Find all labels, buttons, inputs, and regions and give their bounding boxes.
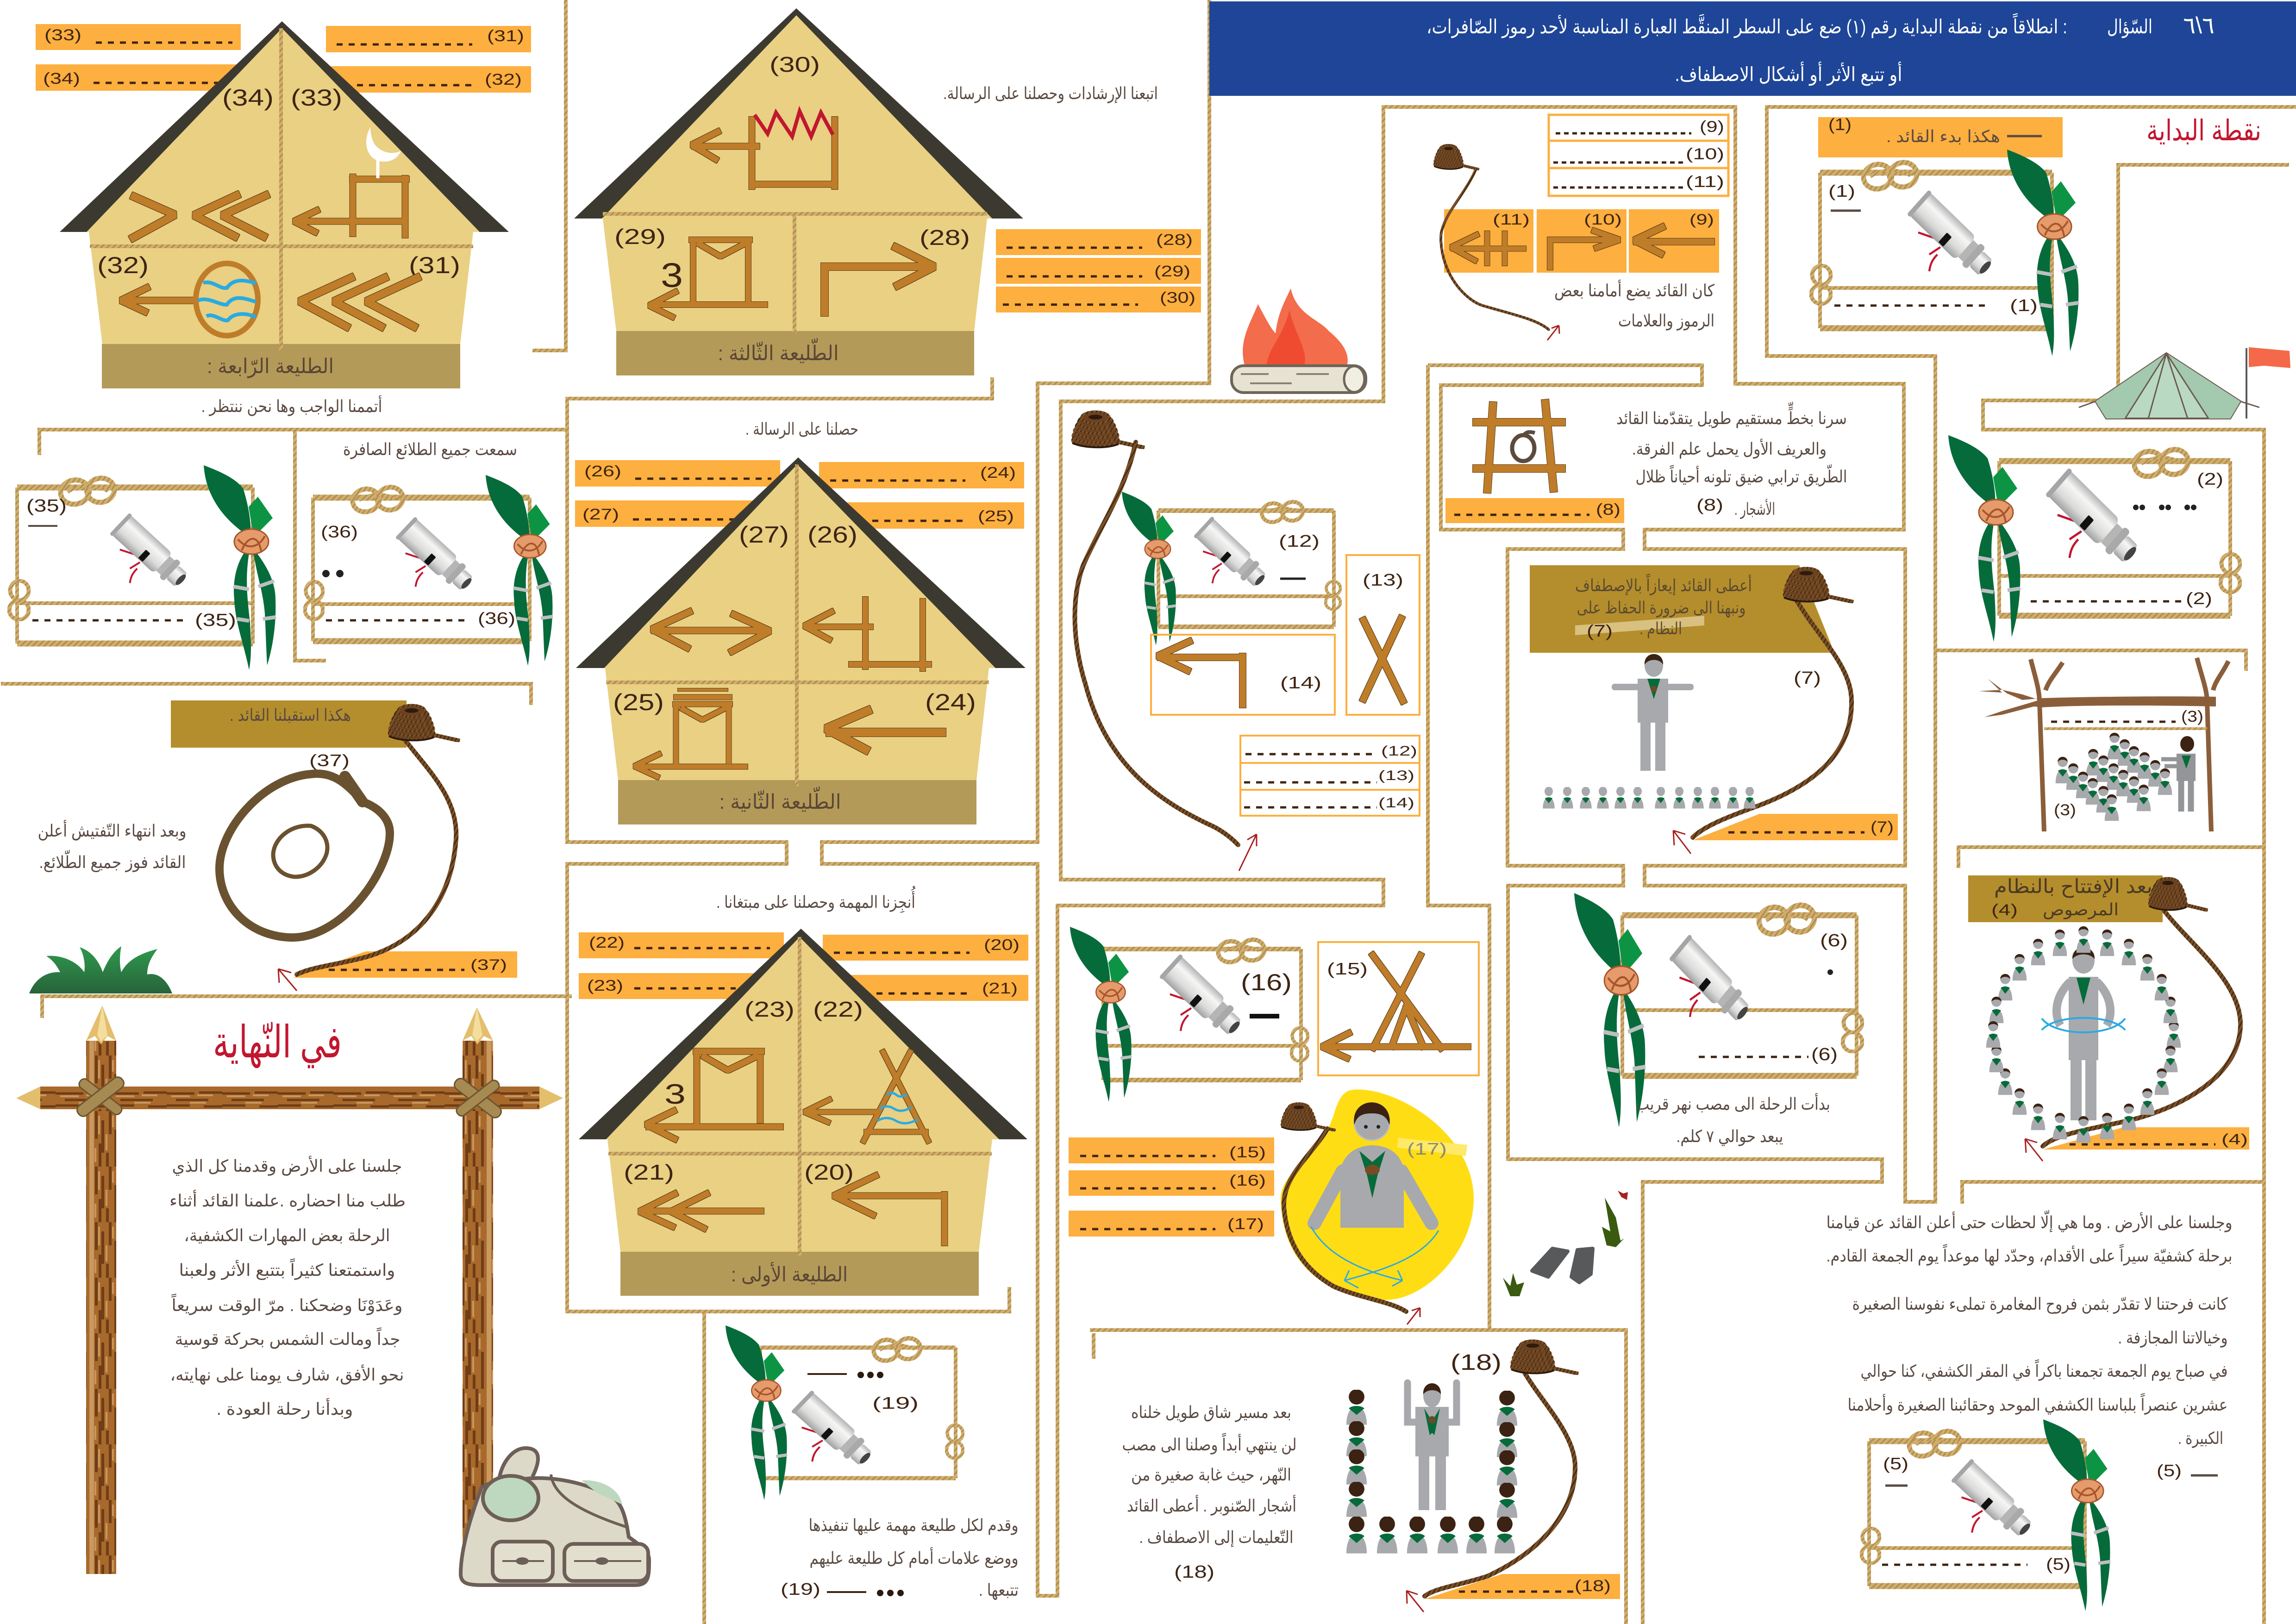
text: task given to each patrol: [781, 1516, 1019, 1600]
text: task given to each patrol: ووضع علامات أمام كل طليعة عليهم: [809, 1547, 1019, 1568]
text block: story paragraph: برحلة كشفيّة سيراً على الأقدام، وحدّد لها موعداً يوم الجمعة القادم.: [1826, 1244, 2233, 1266]
panel: rope trail with leader's signs 9-11: (9): [1689, 211, 1714, 228]
panel: log sign 8: سرنا بخطٍّ مستقيم طويل يتقدّمنا القائد: [1616, 402, 1847, 428]
panel: house 1: (20): [984, 936, 1020, 953]
text: house 1 caption: أُنجِزنا المهمة وحصلنا على مبتغانا .: [716, 886, 916, 913]
panel: whistle frame 35: (35): [195, 611, 236, 630]
text: task given to each patrol: تتبعها .: [979, 1580, 1019, 1600]
leader with arms raised: [1408, 1383, 1457, 1510]
panel: house 1: (21): [624, 1160, 674, 1184]
post right: [463, 1007, 493, 1575]
panel: house 4: (31): [409, 252, 460, 278]
icon: campfire: [1232, 288, 1366, 393]
title: at the end: في النّهاية: [213, 1018, 342, 1068]
panel: house 1: (23): [744, 997, 795, 1021]
panel: house 4: (33): [291, 85, 342, 111]
lashing right: [452, 1076, 503, 1120]
panel: whistle frame 19: (19): [872, 1393, 919, 1412]
panel: yellow sitting figure 17: [1281, 1090, 1474, 1324]
text block: story paragraph: (5): [2157, 1461, 2182, 1480]
text block: ending: الرحلة بعض المهارات الكشفية،: [184, 1226, 390, 1245]
leader figure: [2161, 736, 2196, 812]
panel: U formation 18: النّهر، حيث غابة صغيرة من: [1131, 1465, 1291, 1485]
panel: house 4: [36, 21, 531, 388]
answer bars 15-17: (16): [1229, 1172, 1266, 1189]
panel: lining up 7: (7): [1871, 818, 1894, 836]
answer bars: house 3: [996, 229, 1201, 312]
text: house 3 caption: اتبعنا الإرشادات وحصلنا على الرسالة.: [943, 84, 1158, 103]
icon: footprints and grass: [1503, 1191, 1628, 1296]
text block: ending: وعَدَوْنَا وضحكنا . مرّ الوقت سريعاً: [171, 1293, 403, 1315]
panel: U formation 18: (18): [1174, 1562, 1214, 1582]
instruction line 1: : انطلاقاً من نقطة البداية رقم (١) ضع على السطر المنقَّط العبارة المناسبة لأحد رموز الصّافرات،: [1426, 13, 2067, 38]
panel: rope trail with leader's signs 9-11: الرموز والعلامات: [1618, 311, 1714, 331]
icon: tent and flag: [2079, 347, 2290, 418]
text block: ending: [169, 1156, 406, 1419]
text: house 4 caption: أتممنا الواجب وها نحن ننتظر .: [201, 395, 382, 416]
panel: circle formation 4: المرصوص: [2043, 900, 2119, 919]
panel: starting whistle frame 1: (1): [2010, 296, 2038, 315]
panel: log sign 8: والعريف الأول يحمل علم الفرقة.: [1632, 438, 1827, 459]
panel: whistle frame 5: (5): [1883, 1454, 1908, 1473]
text block: story paragraph: [1826, 1210, 2233, 1480]
panel: starting whistle frame 1: (1): [1828, 181, 1855, 200]
panel: whistle frame 6: [1574, 893, 1862, 1146]
panel: ending signpost: [16, 1006, 563, 1575]
panel: whistle frame 2: (2): [2197, 469, 2223, 488]
center leader: [2042, 947, 2125, 1120]
panel: starting whistle frame 1: (1): [1828, 115, 1852, 134]
panel: U formation 18: (18): [1575, 1577, 1611, 1595]
panel: whistle frame 5: [1862, 1419, 2110, 1611]
panel: whistle frame 5: (5): [2046, 1555, 2071, 1574]
panel: whistle frame 6: يبعد حوالي ٧ كلم.: [1676, 1127, 1783, 1146]
text block: ending: جلسنا على الأرض وقدمنا كل الذي: [172, 1156, 402, 1176]
panel: U formation 18: أشجار الصّنوبر . أعطى القائد: [1127, 1495, 1296, 1516]
panel: log sign 8: [1445, 400, 1847, 523]
panel: rope trail with leader's signs 9-11: (11): [1493, 211, 1530, 228]
text: house 2 caption: حصلنا على الرسالة .: [745, 419, 858, 439]
panel: U formation 18: [1122, 1341, 1620, 1612]
panel: U formation 18: لن ينتهي أبداً وصلنا الى مصب: [1122, 1433, 1296, 1455]
text block: story paragraph: في صباح يوم الجمعة تجمعنا باكراً في المقر الكشفي، كنا حوالي: [1860, 1359, 2228, 1381]
panel: whistle frame 19: [726, 1325, 963, 1500]
panel: rope sign 37: [38, 700, 517, 991]
panel: house 2: (24): [925, 689, 976, 715]
panel: rope trail with leader's signs 9-11: [1434, 115, 1728, 340]
panel: whistle frame 36: [305, 475, 553, 666]
panel: U formation 18: بعد مسير شاق طويل خلناه: [1131, 1403, 1291, 1422]
text block: ending: واستمتعنا كثيراً بتتبع الأثر ولعبنا: [179, 1258, 395, 1280]
lashing left: [75, 1075, 126, 1118]
text: all patrols heard the whistle: سمعت جميع الطلائع الصافرة: [343, 440, 517, 459]
panel: tree with patrol group 3: [1979, 658, 2228, 831]
panel: circle formation 4: (4): [2221, 1131, 2248, 1148]
text block: ending: طلب منا احضاره .علمنا القائد أثناء: [169, 1190, 406, 1211]
panel: lining up 7: أعطى القائد إيعازاً بالإصطفاف: [1575, 574, 1752, 595]
panel: house 2: (25): [978, 507, 1014, 525]
icon: grass tuft: [29, 946, 172, 993]
panel: rope sign 37: (37): [470, 956, 507, 973]
panel: log sign 8: الطّريق ترابي ضيق تلونه أحياناً ظلال: [1635, 464, 1847, 487]
panel: rope trail with leader's signs 9-11: (9): [1700, 118, 1724, 136]
panel: house 1: (23): [587, 977, 623, 994]
panel: rope trail and whistle 12-14: (13): [1378, 768, 1414, 783]
panel: lining up 7: [1530, 565, 1898, 854]
panel: log sign 8: الأشجار .: [1734, 499, 1775, 519]
panel: tent-sign box 15: (15): [1327, 959, 1368, 978]
panel: house 1: (22): [813, 997, 863, 1021]
panel: house 4: (34): [222, 85, 274, 111]
answer bars: house 3: (28): [1156, 231, 1193, 248]
panel: rope sign 37: وبعد انتهاء التّفتيش أعلن: [38, 820, 186, 841]
panel: circle formation 4: (4): [1991, 901, 2018, 919]
panel: rope trail with leader's signs 9-11: كان القائد يضع أمامنا بعض: [1554, 280, 1715, 300]
panel: house 3: (30): [770, 52, 820, 76]
text block: story paragraph: كانت فرحتنا لا تقدّر بثمن فروح المغامرة تملىء نفوسنا الصغيرة: [1852, 1294, 2228, 1314]
question number: ٦\٦: [2183, 12, 2215, 38]
panel: house 4: (34): [43, 70, 80, 87]
title: starting point: نقطة البداية: [2146, 115, 2261, 147]
panel: starting whistle frame 1: [1811, 115, 2079, 356]
panel: whistle frame 35: [9, 465, 276, 670]
panel: house 2: (27): [739, 522, 789, 548]
panel: whistle frame 2: [1948, 435, 2240, 642]
panel: rope sign 37: القائد فوز جميع الطّلائع.: [39, 849, 186, 872]
panel: whistle frame 6: بدأت الرحلة الى مصب نهر قريب: [1636, 1093, 1830, 1114]
panel: log sign 8: (8): [1596, 501, 1620, 518]
panel: U formation 18: التّعليمات إلى الاصطفاف .: [1139, 1528, 1294, 1547]
panel: house 1: (21): [982, 980, 1018, 997]
text block: ending: نحو الأفق، شارف يومنا على نهايته،: [170, 1364, 404, 1385]
panel: starting whistle frame 1: هكذا بدء القائد .: [1886, 127, 2000, 146]
panel: house 2: (26): [807, 522, 857, 548]
panel: rope trail and whistle 12-14: (12): [1279, 531, 1320, 550]
panel: lining up 7: (7): [1587, 621, 1613, 640]
panel: house 2: (25): [613, 689, 664, 715]
panel: rope trail with leader's signs 9-11: (10): [1584, 211, 1622, 228]
row of scouts: [1543, 787, 1756, 809]
panel: rope trail and whistle 12-14: (12): [1381, 743, 1417, 759]
panel: house 2: [575, 457, 1026, 824]
panel: house 3: (29): [614, 225, 666, 249]
panel: house 2: (26): [584, 462, 621, 480]
panel: whistle frame 16: [1070, 927, 1308, 1102]
panel: lining up 7: (7): [1794, 668, 1821, 688]
panel: lining up 7: ونبهنا الى ضرورة الحفاظ على: [1577, 598, 1745, 618]
panel: house 2: (27): [582, 506, 619, 523]
post left: [86, 1006, 116, 1574]
panel: whistle frame 6: (6): [1811, 1045, 1838, 1064]
panel: tree with patrol group 3: (3): [2054, 801, 2076, 819]
text block: ending: جداً ومالت الشمس بحركة قوسية: [175, 1327, 400, 1349]
leader with arms out: [1612, 654, 1694, 771]
panel: house 4: (32): [485, 71, 522, 88]
header banner: [1209, 1, 2296, 96]
panel: rope trail and whistle 12-14: [1072, 412, 1420, 871]
instruction line 2: أو تتبع الأثر أو أشكال الاصطفاف.: [1675, 62, 1902, 86]
panel: whistle frame 36: (36): [478, 609, 515, 628]
panel: house 4: (31): [487, 27, 524, 45]
panel: whistle frame 35: (35): [26, 496, 67, 516]
panel: lining up 7: النظام .: [1639, 619, 1682, 638]
panel: house 4: الطليعة الرّابعة :: [207, 355, 334, 378]
question label: السّؤال: [2107, 16, 2152, 38]
text: task given to each patrol: (19): [781, 1580, 820, 1599]
columns of scouts: [1346, 1389, 1517, 1554]
panel: rope trail with leader's signs 9-11: (10): [1686, 145, 1724, 163]
panel: house 2: (24): [980, 464, 1016, 481]
icon: backpack: [461, 1448, 649, 1585]
panel: U formation 18: (18): [1451, 1350, 1501, 1375]
panel: circle formation 4: بعد الإفتتاح بالنظام: [1994, 875, 2152, 898]
panel: house 1: 3: [664, 1079, 686, 1110]
panel: house 3: الطّليعة الثّالثة :: [718, 338, 839, 365]
crossbar: [16, 1087, 563, 1109]
panel: whistle frame 36: (36): [321, 522, 358, 541]
panel: tent-sign box 15: [1318, 942, 1479, 1075]
text block: story paragraph: وخيالاتنا المجازفة .: [2118, 1328, 2228, 1348]
panel: whistle frame 2: (2): [2186, 589, 2212, 608]
panel: house 3: 3: [661, 256, 683, 294]
text: task given to each patrol: وقدم لكل طليعة مهمة عليها تنفيذها: [808, 1516, 1019, 1535]
panel: rope sign 37: هكذا استقبلنا القائد .: [230, 706, 351, 725]
panel: house 1: الطليعة الأولى :: [731, 1262, 848, 1287]
panel: house 4: (32): [97, 252, 149, 278]
answer bars 15-17: [1069, 1137, 1274, 1237]
answer bars: house 3: (29): [1154, 262, 1190, 280]
ring of scouts: [1986, 926, 2181, 1143]
text block: story paragraph: الكبيرة .: [2178, 1429, 2223, 1448]
panel: rope sign 37: (37): [309, 751, 350, 770]
panel: house 3: (28): [920, 225, 970, 250]
panel: house 4: (33): [44, 26, 81, 44]
answer bars 15-17: (15): [1229, 1143, 1266, 1161]
panel: house 2: الطّليعة الثّانية :: [719, 787, 841, 813]
text block: ending: وبدأنا رحلة العودة .: [217, 1398, 353, 1419]
panel: circle formation 4: [1968, 875, 2249, 1161]
panel: log sign 8: (8): [1696, 495, 1723, 514]
panel: whistle frame 16: (16): [1241, 969, 1292, 995]
panel: whistle frame 6: (6): [1820, 931, 1848, 950]
panel: rope trail and whistle 12-14: (14): [1280, 673, 1321, 692]
panel: tree with patrol group 3: (3): [2181, 708, 2203, 725]
panel: house 1: [579, 929, 1028, 1296]
panel: rope trail with leader's signs 9-11: (11): [1686, 173, 1724, 191]
panel: house 3: [574, 8, 1023, 375]
panel: house 1: (22): [589, 934, 625, 951]
text block: story paragraph: عشرين عنصراً بلباسنا الكشفي الموحد وحقائبنا الصغيرة وأحلامنا: [1847, 1393, 2228, 1415]
answer bars: house 3: (30): [1160, 289, 1195, 306]
answer bars 15-17: (17): [1227, 1215, 1264, 1232]
panel: yellow sitting figure 17: (17): [1407, 1139, 1447, 1158]
panel: rope trail and whistle 12-14: (14): [1378, 795, 1414, 811]
panel: house 1: (20): [804, 1160, 854, 1184]
panel: rope trail and whistle 12-14: (13): [1363, 570, 1403, 589]
text block: story paragraph: وجلسنا على الأرض . وما هي إلّا لحظات حتى أعلن القائد عن قيامنا: [1826, 1210, 2233, 1232]
